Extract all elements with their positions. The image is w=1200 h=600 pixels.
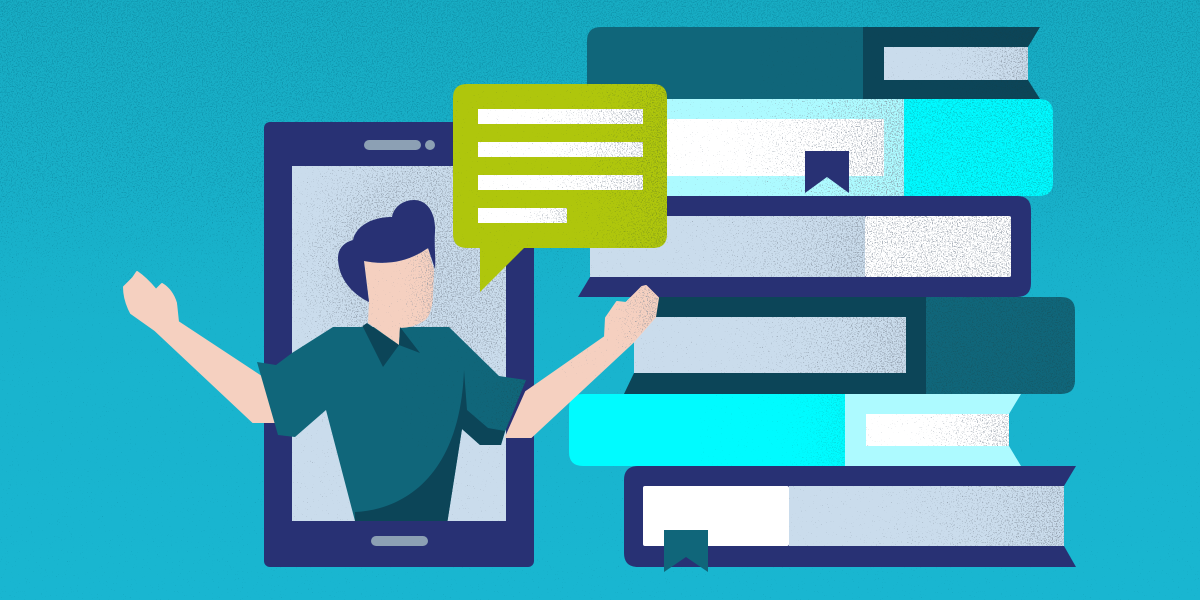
- phone speaker: [364, 140, 421, 150]
- right arm and hand: [506, 280, 660, 437]
- bookmark: teal: [664, 530, 708, 572]
- book 2: cyan with white pages and bookmark: [640, 99, 1053, 196]
- book 1: dark teal, top: [587, 27, 1040, 99]
- bubble text line 4: [478, 208, 567, 223]
- person: [124, 200, 660, 521]
- hair: [338, 200, 435, 302]
- book stack: [569, 27, 1076, 572]
- speech bubble: [453, 84, 667, 292]
- neck and face: [364, 245, 436, 345]
- bookmark: navy: [805, 151, 849, 193]
- bubble text line 3: [478, 175, 643, 190]
- shirt shadow: [355, 370, 505, 521]
- smartphone: [264, 122, 534, 567]
- book 3: navy with pale and white pages: [578, 196, 1031, 297]
- bubble text line 1: [478, 109, 643, 124]
- left arm and hand: [124, 272, 276, 422]
- phone camera: [425, 140, 435, 150]
- phone home button: [371, 536, 428, 546]
- book 6: navy, bottom, with bookmark: [624, 466, 1076, 572]
- shirt collar: [362, 323, 420, 367]
- bubble text line 2: [478, 142, 643, 157]
- book 4: dark teal with spine on right: [624, 297, 1075, 394]
- phone screen: [292, 166, 506, 521]
- book 5: cyan with spine on left: [569, 394, 1021, 466]
- shirt: [257, 327, 526, 521]
